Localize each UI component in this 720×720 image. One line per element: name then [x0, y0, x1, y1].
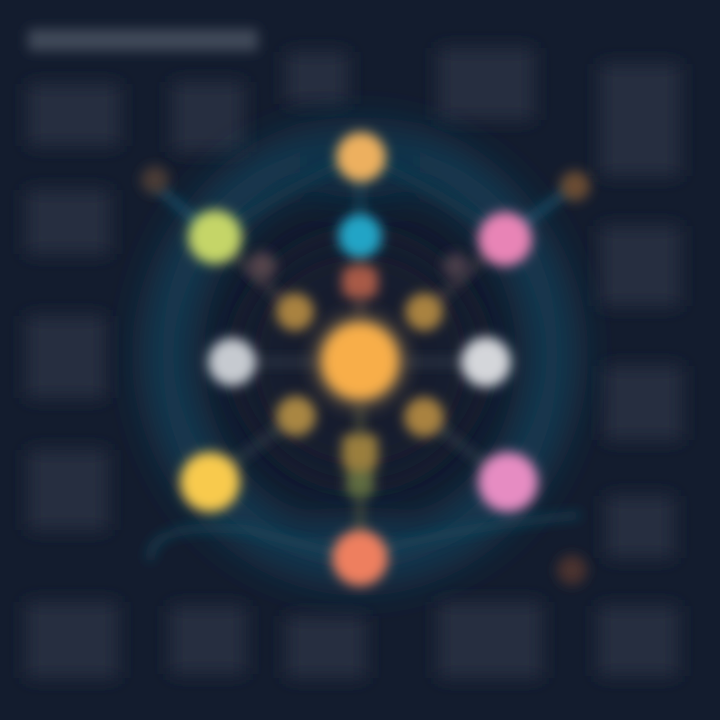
node: yellow: [180, 452, 240, 512]
panel: left text blocks: [26, 190, 110, 530]
panel: top text blocks: [28, 48, 534, 152]
connection lines: [150, 155, 580, 560]
outer small nodes: [141, 166, 590, 585]
panel: right text blocks: [600, 64, 682, 558]
node: grey right: [461, 337, 511, 387]
node: coral bottom: [332, 530, 388, 586]
node: orange top: [336, 132, 386, 182]
node: rust: [342, 266, 378, 298]
node: blue: [338, 214, 382, 258]
panel: bottom text blocks: [26, 602, 678, 678]
node: pink right: [478, 212, 532, 266]
central hub: [314, 315, 406, 407]
title: [28, 29, 258, 51]
node: lime: [188, 210, 242, 264]
inner satellite nodes: [276, 293, 444, 496]
dark hub interior: [240, 240, 480, 480]
node: grey left: [208, 338, 256, 386]
node: pink lower: [478, 452, 538, 512]
network glow: [168, 142, 552, 580]
